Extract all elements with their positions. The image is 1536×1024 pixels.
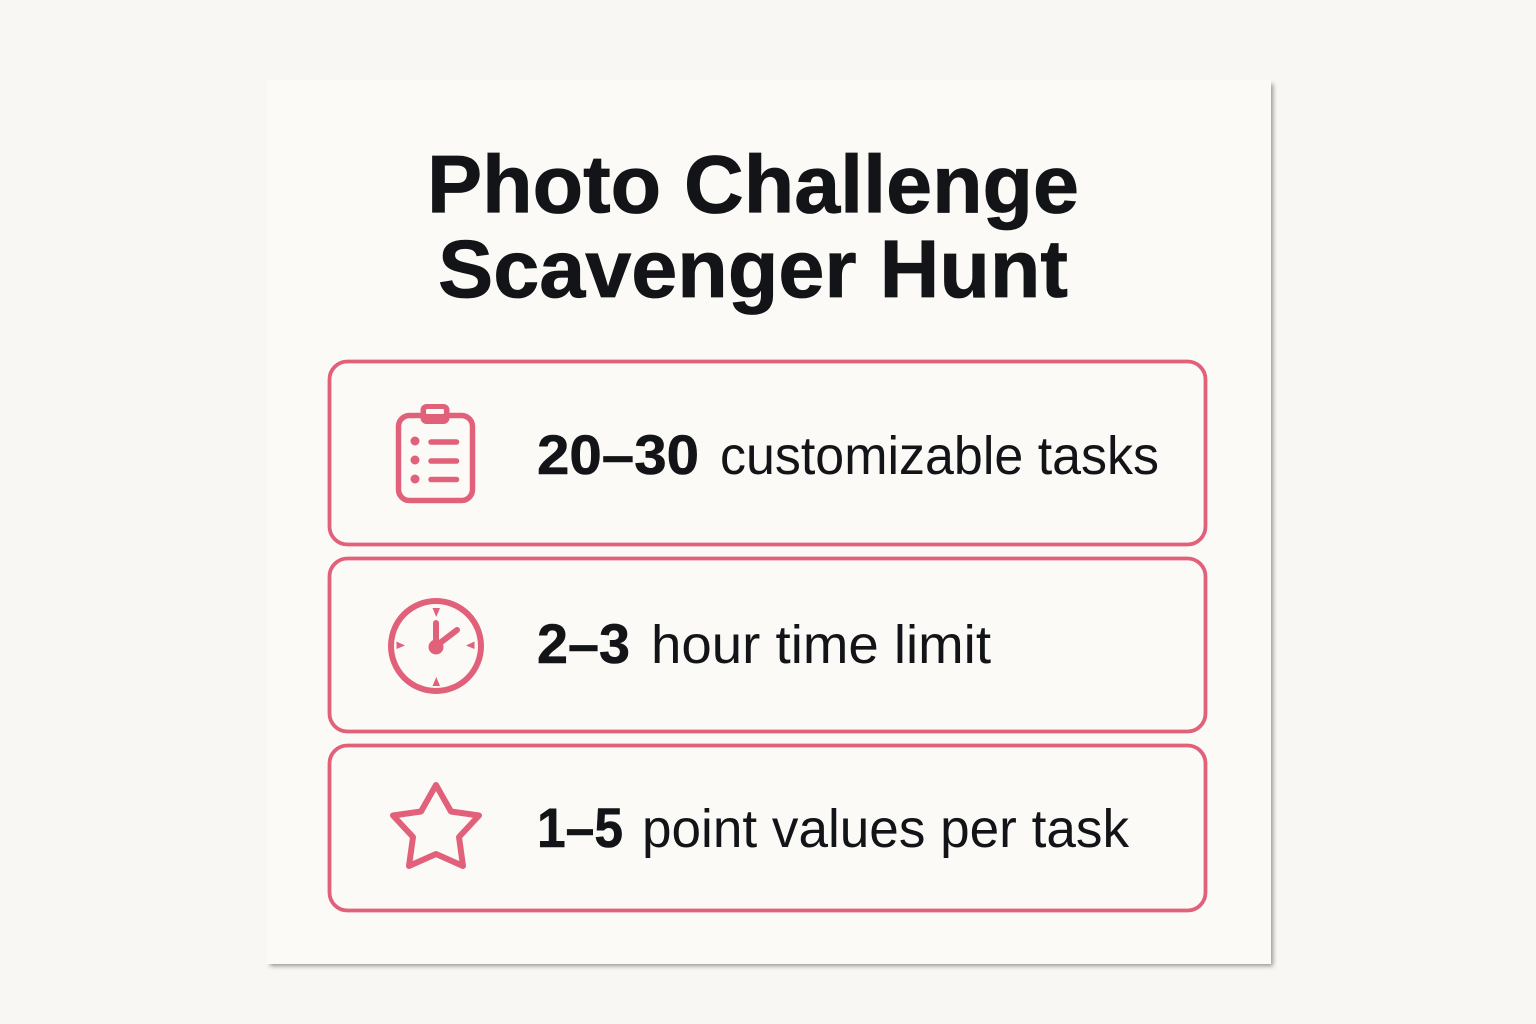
points text: point values per task [642,799,1130,859]
points text: 1–5 [537,796,623,859]
panel: time [330,558,1206,732]
panel: tasks [330,362,1206,544]
icon: clipboard [398,404,472,500]
icon: clock [391,601,481,691]
time text: 2–3 [537,612,630,675]
panel: points [330,746,1206,910]
title [427,140,1079,315]
title: Photo Challenge [427,140,1079,230]
time text: hour time limit [651,615,991,675]
card shadow [270,84,1273,966]
task text: 20–30 [537,423,699,486]
title: Scavenger Hunt [438,224,1068,315]
task text [537,423,1159,486]
panel: card [266,80,1271,964]
task text: customizable tasks [720,426,1159,486]
icon: star [393,785,479,866]
